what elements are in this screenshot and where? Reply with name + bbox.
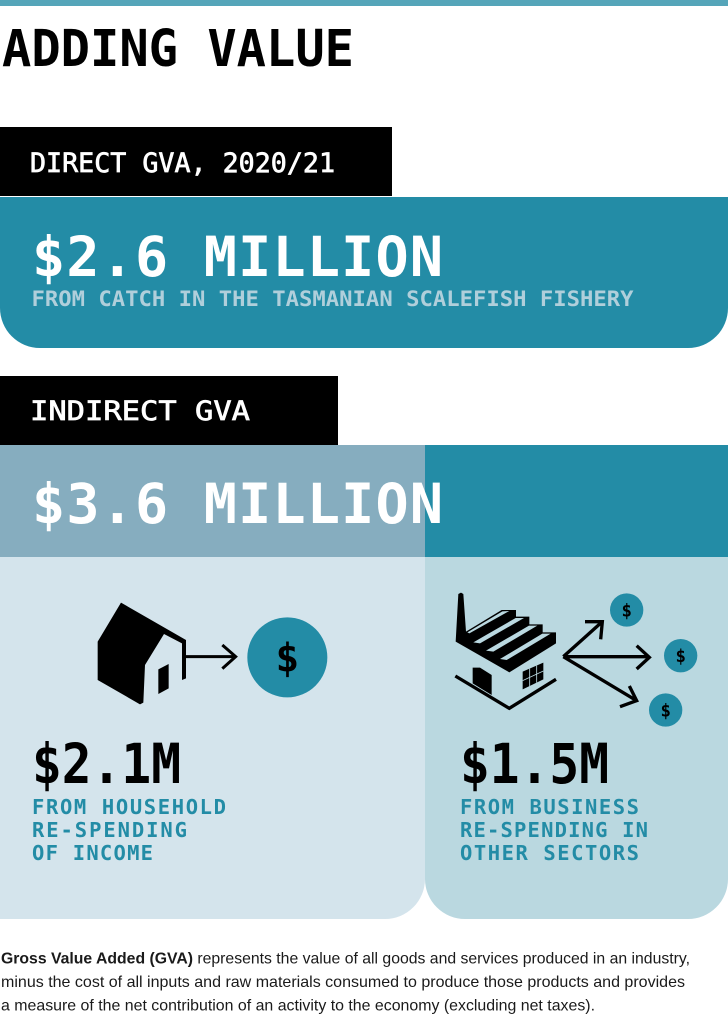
direct value card: [0, 197, 728, 348]
household description: RE-SPENDING: [32, 818, 187, 842]
title: ADDING VALUE: [2, 20, 354, 79]
panel: indirect GVA: [0, 376, 728, 919]
business description: [460, 795, 648, 865]
panel: direct GVA: [0, 127, 728, 348]
icon: house with arrow to dollar: $: [275, 635, 299, 681]
direct value card: $2.6 MILLION: [32, 225, 443, 289]
panel: business re-spending: [380, 557, 728, 919]
GVA definition text: [1, 950, 690, 1014]
business description: OTHER SECTORS: [460, 841, 639, 865]
direct heading bar: DIRECT GVA, 2020/21: [30, 148, 335, 179]
top accent bar: [0, 0, 728, 6]
GVA definition text: a measure of the net contribution of an activity to the economy (excluding net taxes).: [1, 998, 595, 1014]
icon: factory: [455, 593, 556, 708]
indirect heading bar: [0, 376, 338, 445]
household description: FROM HOUSEHOLD: [32, 795, 226, 819]
direct value card: FROM CATCH IN THE TASMANIAN SCALEFISH FISHERY: [32, 287, 634, 311]
household description: [32, 795, 226, 865]
business description: FROM BUSINESS: [460, 795, 639, 819]
indirect heading bar: INDIRECT GVA: [30, 396, 250, 427]
icon: arrows to dollars: $: [660, 701, 671, 721]
icon: house with arrow to dollar: [98, 603, 327, 704]
household description: OF INCOME: [32, 841, 153, 865]
business description: RE-SPENDING IN: [460, 818, 648, 842]
GVA definition text: minus the cost of all inputs and raw materials consumed to produce those products and provides: [1, 974, 685, 991]
indirect total band: $3.6 MILLION: [32, 472, 443, 536]
icon: arrows to dollars: $: [621, 601, 632, 621]
direct heading bar: [0, 127, 392, 196]
icon: arrows to dollars: $: [675, 647, 686, 667]
household value: $2.1M: [32, 732, 181, 796]
panel: household re-spending: [0, 557, 425, 919]
GVA definition text: Gross Value Added (GVA) represents the value of all goods and services produced in an industry,: [1, 950, 690, 968]
indirect total band: [0, 445, 728, 557]
icon: arrows to dollars: [563, 593, 697, 727]
business value: $1.5M: [460, 732, 609, 796]
